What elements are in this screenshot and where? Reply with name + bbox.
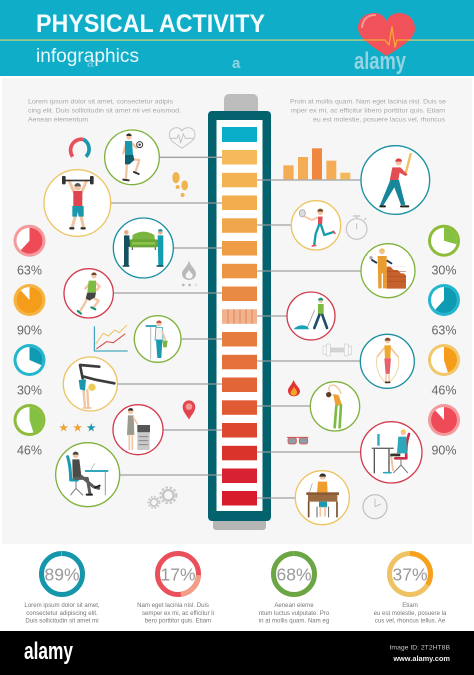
donut stat: 89%: Lorem ipsum dolor sit amet, — [24, 602, 100, 609]
donut stat: 68%: ntum luctus vulputate. Pro — [259, 610, 330, 617]
icon: donut arc — [71, 139, 89, 157]
activity: weight lifter — [44, 170, 111, 236]
icon: stopwatch — [346, 216, 367, 239]
connector lines — [110, 157, 361, 498]
image id: Image ID: 2T2HT8B — [390, 644, 450, 652]
activity: bricklayer — [361, 244, 415, 298]
donut stat: 89% — [24, 554, 100, 624]
intro text right: eu est molestie, posuere lacus vel, rhoncus — [313, 116, 446, 124]
activity: gymnast — [63, 357, 117, 411]
donut stat: 68%: 68% — [276, 564, 312, 584]
alamy logo: alamy — [24, 638, 73, 665]
pie chart: 46% green — [14, 404, 46, 458]
pie chart: 30% teal — [14, 344, 46, 398]
activity: soccer — [105, 130, 159, 185]
donut stat: 37% — [374, 554, 447, 624]
donut stat: 68%: in at mollis quam. Nam eg — [259, 618, 329, 624]
donut stat: 17%: 17% — [160, 564, 196, 584]
pie chart: 30% green — [428, 225, 460, 278]
donut stat: 89%: 89% — [44, 564, 80, 584]
subtitle: infographics — [36, 45, 139, 67]
donut stat: 17%: bero porttitor quis. Etiam — [145, 618, 211, 624]
watermark: a — [87, 56, 94, 70]
pie chart: 46% orange: 46% — [431, 384, 457, 398]
activity: baseball — [361, 146, 430, 214]
icon: footprints — [172, 172, 188, 197]
battery level bars — [222, 127, 257, 506]
pie chart: 46% green: 46% — [17, 444, 42, 458]
activity: lawn mowing — [287, 292, 335, 340]
icon: dumbbell — [323, 344, 352, 356]
icon: heart rate outline — [169, 128, 195, 148]
icon: three stars: ★ — [86, 420, 96, 434]
donut stat: 37%: 37% — [392, 564, 428, 584]
donut stat: 68% — [259, 554, 330, 624]
watermark: alamy — [354, 48, 406, 75]
donut stat: 17%: semper ex mi, ac efficitur li — [142, 610, 214, 617]
pie chart: 46% orange — [428, 344, 460, 398]
pie chart: 63% teal: 63% — [431, 324, 457, 338]
activity: stretching — [310, 382, 360, 431]
donut stat: 17% — [137, 554, 214, 624]
intro text left: Aenean elementum — [28, 116, 88, 124]
watermark: a — [232, 55, 241, 72]
donut stat: 68%: Aenean eleme — [274, 602, 314, 609]
icon: heart with pulse — [358, 13, 415, 56]
activity: office worker at copier — [113, 405, 163, 455]
activity: student at table — [295, 471, 349, 525]
icon: three stars: ★ — [58, 420, 69, 434]
footer bar — [0, 631, 474, 675]
body panel — [2, 78, 472, 544]
donut stat: 89%: consectetur adipiscing elit. — [26, 610, 98, 617]
intro text left — [28, 98, 181, 124]
icon: three stars — [58, 420, 96, 434]
title: PHYSICAL ACTIVITY — [36, 10, 265, 38]
battery meter — [208, 94, 271, 530]
icon: three stars: ★ — [72, 420, 83, 434]
icon: grey flame with stars — [182, 261, 197, 286]
icon: glasses — [287, 437, 308, 444]
intro text right: mper ex mi, ac efficitur libero porttitor quis. Etiam — [291, 108, 445, 114]
icon: wall clock — [363, 495, 387, 519]
icon: gears — [148, 487, 176, 508]
icon: location pin — [183, 400, 195, 420]
activity: woman at computer — [361, 422, 422, 483]
intro text right — [290, 98, 446, 124]
pie chart: 90% red — [428, 404, 460, 458]
pie chart: 90% orange — [14, 284, 46, 338]
donut stat: 37%: Etiam — [402, 602, 418, 609]
pie chart: 63% red: 63% — [17, 264, 42, 278]
website: www.alamy.com — [392, 654, 450, 663]
pie chart: 63% red — [14, 225, 46, 278]
watermark — [87, 48, 406, 75]
pie chart: 30% green: 30% — [431, 264, 457, 278]
donut stat: 17%: Nam eget lacinia nisl. Duis — [137, 602, 209, 609]
pie chart: 90% red: 90% — [431, 444, 457, 458]
activity: man at desk — [56, 443, 120, 507]
intro text left: Lorem ipsum dolor sit amet, consectetur adipis — [28, 98, 174, 106]
header band — [0, 0, 474, 76]
donut stat: 37%: eu est molestie, posuere la — [374, 610, 447, 617]
donut stat: 37%: cus vel, rhoncus tellus. Ae — [375, 618, 446, 624]
intro text left: cing elit. Duis sollicitudin sit amet mi vel euismod. — [28, 108, 181, 114]
pie chart: 63% teal — [428, 284, 460, 338]
icon: bar chart — [283, 148, 350, 179]
pie chart: 30% teal: 30% — [17, 384, 42, 398]
activity: runner — [64, 269, 113, 318]
activity: skipping rope — [360, 334, 414, 388]
pie chart: 90% orange: 90% — [17, 324, 42, 338]
activity: sofa movers — [113, 218, 173, 278]
icon: line chart — [94, 325, 127, 351]
donut stat: 89%: Duis sollicitudin sit amet mi — [25, 618, 99, 624]
activity: tennis — [291, 201, 341, 250]
activity: cleaner — [134, 316, 181, 362]
icon: red flame — [288, 380, 300, 396]
intro text right: Proin at mollis quam. Nam eget lacinia nisl. Duis se — [290, 98, 446, 106]
